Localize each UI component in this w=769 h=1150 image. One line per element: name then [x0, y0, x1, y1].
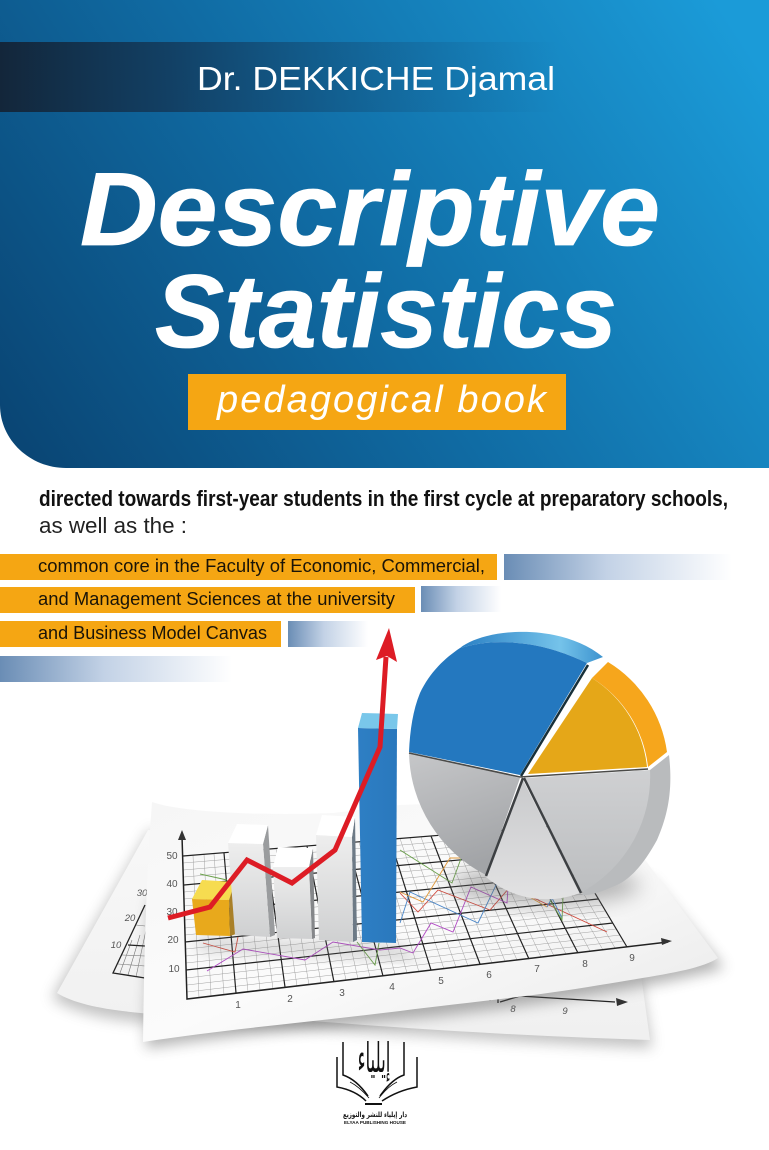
back grid	[113, 905, 146, 978]
axis labels: 7	[534, 964, 540, 975]
orange list bars: and Business Model Canvas	[38, 622, 267, 643]
bar shadow	[196, 938, 420, 960]
blue bar	[358, 713, 398, 943]
yellow cube	[192, 880, 236, 936]
author band	[0, 42, 560, 112]
axis labels: 10	[168, 964, 180, 975]
calligraphy: إيلياء	[358, 1035, 390, 1082]
white bar 2	[273, 847, 315, 939]
fading blue bars	[0, 554, 732, 682]
publisher name arabic: دار إيلياء للنشر والتوزيع	[343, 1110, 407, 1119]
publisher logo	[337, 1035, 417, 1125]
axis labels: 8	[582, 959, 588, 970]
pie: blue slice	[409, 642, 587, 775]
pie: blue back rim	[460, 632, 603, 663]
fine grid	[183, 827, 623, 998]
axis labels: 6	[486, 970, 492, 981]
orange list bars: and Management Sciences at the university	[38, 588, 396, 609]
panel: blue header	[0, 0, 769, 468]
white bar 1	[228, 824, 275, 937]
publisher name latin: ELYAA PUBLISHING HOUSE	[344, 1120, 406, 1125]
title: Statistics	[155, 254, 617, 370]
pie: yellow slice	[528, 678, 647, 774]
orange list bars: common core in the Faculty of Economic, Commercial,	[38, 555, 485, 576]
white bar 3	[316, 815, 357, 942]
pie: yellow rim	[592, 662, 667, 767]
subtitle box	[188, 374, 566, 430]
back labels	[111, 888, 568, 1017]
major grid	[183, 826, 627, 993]
data lines	[200, 850, 607, 971]
subtitle box: pedagogical book	[216, 379, 548, 421]
back labels: 30	[137, 888, 148, 899]
pie: gray right side	[582, 755, 670, 895]
red trend arrow	[168, 628, 397, 918]
axis labels: 1	[235, 1000, 241, 1011]
pie: gray left slice	[409, 753, 520, 875]
audience text: as well as the :	[39, 513, 187, 538]
axis labels: 5	[438, 976, 444, 987]
chart illustration	[52, 628, 724, 1048]
pie: gray middle slice	[486, 780, 580, 899]
logo base bar	[365, 1103, 382, 1105]
title	[80, 152, 660, 370]
axis labels: 20	[167, 935, 179, 946]
3D pie chart	[409, 632, 670, 899]
back labels: 9	[562, 1006, 568, 1017]
author name: Dr. DEKKICHE Djamal	[197, 60, 555, 97]
axis labels: 2	[287, 994, 293, 1005]
axis labels: 40	[166, 879, 178, 890]
open book outline	[337, 1042, 417, 1101]
axis labels: 50	[166, 851, 178, 862]
axes	[178, 830, 672, 999]
back labels: 10	[111, 940, 122, 951]
back labels: 8	[510, 1004, 516, 1015]
orange list bars	[0, 554, 497, 647]
axis labels: 4	[389, 982, 395, 993]
axis labels: 30	[166, 907, 178, 918]
axis labels: 9	[629, 953, 635, 964]
title: Descriptive	[80, 152, 660, 268]
pie: gray right slice	[525, 770, 650, 892]
back labels: 20	[124, 913, 136, 924]
back paper	[52, 830, 652, 1048]
axis labels	[166, 851, 635, 1011]
audience text	[39, 486, 728, 538]
axis labels: 3	[339, 988, 345, 999]
pie shadow	[450, 865, 640, 905]
front paper	[143, 800, 724, 1048]
pie: slice gaps	[486, 778, 581, 893]
